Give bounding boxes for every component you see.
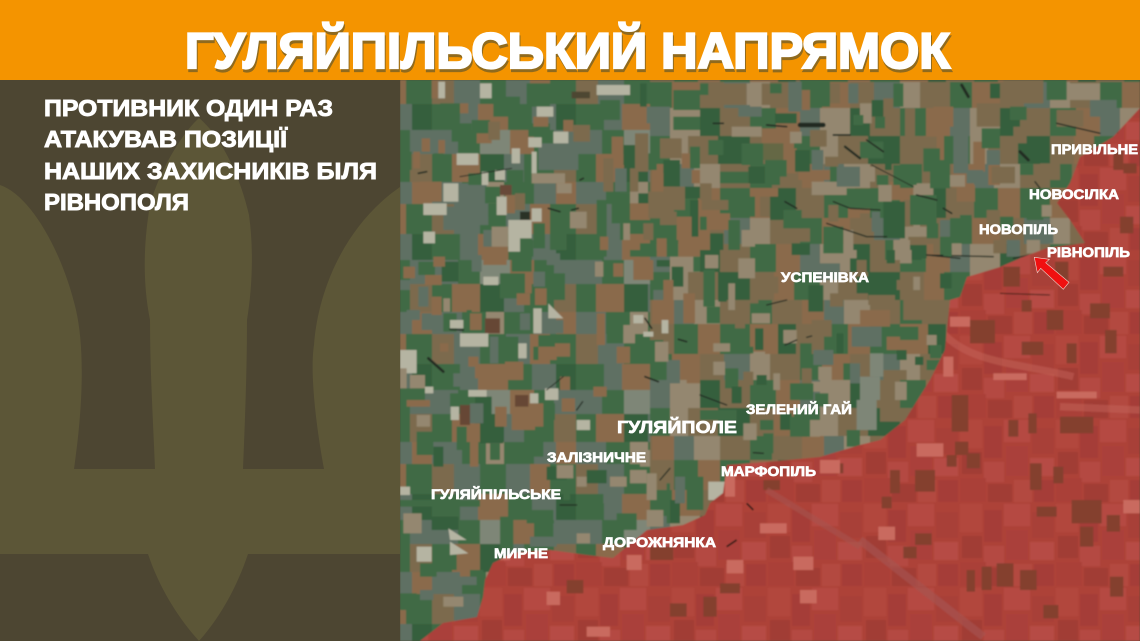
title: ГУЛЯЙПІЛЬСЬКИЙ НАПРЯМОК: [185, 22, 950, 79]
map place labels: МИРНЕ: [494, 545, 548, 561]
map place labels: УСПЕНІВКА: [781, 269, 869, 285]
map place labels: МАРФОПІЛЬ: [721, 463, 816, 479]
map place labels: ГУЛЯЙПІЛЬСЬКЕ: [431, 485, 561, 502]
map place labels: ПРИВІЛЬНЕ: [1051, 141, 1138, 157]
muted satellite tint: [400, 80, 1140, 641]
base farmland west: [400, 80, 650, 641]
title shadow: ГУЛЯЙПІЛЬСЬКИЙ НАПРЯМОК: [186, 25, 951, 82]
map fields: south-west: [400, 250, 700, 430]
map place labels: ДОРОЖНЯНКА: [603, 534, 716, 550]
map place labels: ЗЕЛЕНИЙ ГАЙ: [746, 400, 852, 417]
report text: НАШИХ ЗАХИСНИКІВ БІЛЯ: [44, 158, 377, 184]
map place labels: РІВНОПІЛЬ: [1047, 244, 1130, 260]
left panel background: [0, 0, 400, 641]
report text: РІВНОПОЛЯ: [44, 189, 189, 215]
report text: АТАКУВАВ ПОЗИЦІЇ: [44, 126, 288, 152]
occupied area: eastern fields: [860, 300, 1140, 637]
satellite map: [400, 80, 1140, 641]
arrow: attack direction on Rivnopil: [1034, 257, 1069, 289]
map place labels: НОВОСІЛКА: [1029, 186, 1119, 202]
map fields: south-centre: [700, 250, 960, 430]
trident emblem: [0, 118, 400, 641]
map place labels: [431, 141, 1138, 561]
base farmland east: [649, 80, 1140, 530]
header band: [0, 0, 1140, 80]
report text: [44, 95, 377, 215]
map place labels: ГУЛЯЙПОЛЕ: [617, 416, 737, 437]
occupied area: southern fields: [500, 460, 860, 637]
map fields: north-east: [992, 80, 1117, 258]
map fields: south-west lower: [400, 417, 860, 610]
occupied area: north-east fields: [1000, 123, 1137, 295]
map place labels: ЗАЛІЗНИЧНЕ: [547, 449, 646, 465]
map fields: north-centre: [700, 80, 1000, 260]
map fields: north-west: [400, 80, 700, 260]
map place labels: НОВОПІЛЬ: [979, 221, 1058, 237]
occupied territory overlay: [400, 100, 1140, 641]
report text: ПРОТИВНИК ОДИН РАЗ: [44, 95, 333, 121]
